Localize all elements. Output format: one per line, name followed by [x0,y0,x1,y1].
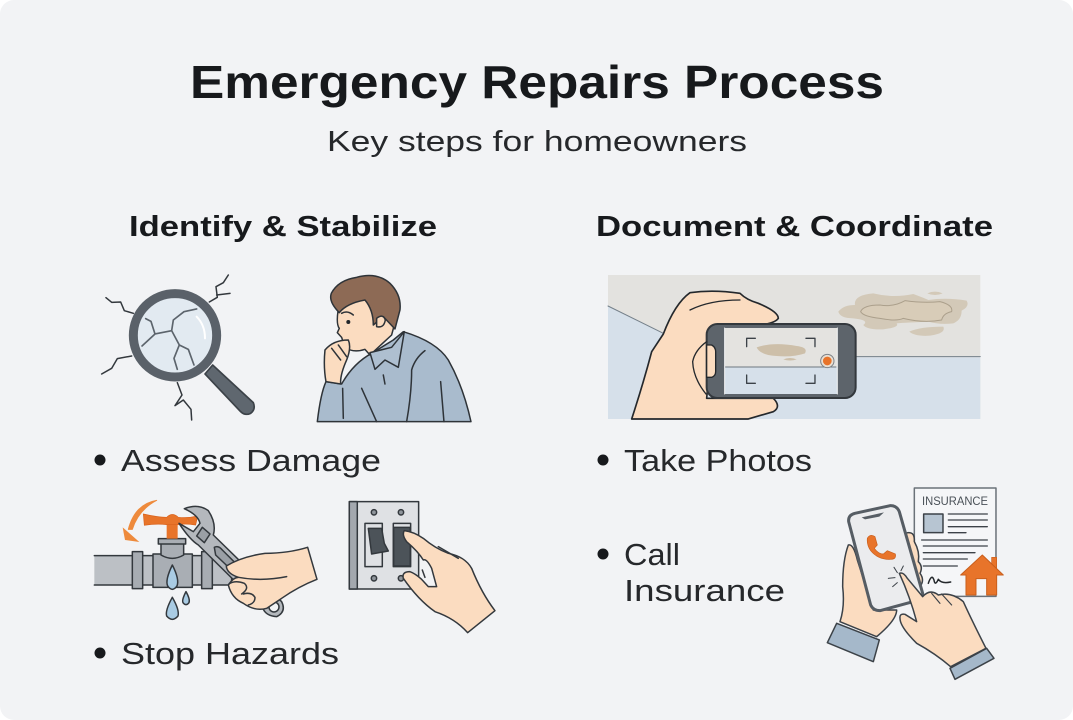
bullet: stop hazards: Stop Hazards [121,636,339,671]
insurance document [914,488,996,596]
bullet: call insurance: Call [624,537,680,572]
back hand fingers [905,533,922,587]
bullet: take photos: Take Photos [624,443,812,478]
heading: document and coordinate: Document & Coordinate [596,211,993,243]
icon: worried person [317,275,471,422]
insurance document: INSURANCE [922,494,988,508]
icon: orange house [961,555,1003,595]
left hand [840,545,897,637]
icon: insurance form and phone call [827,488,1003,679]
phone [849,506,923,611]
left sleeve [827,623,879,662]
bullet: call insurance [598,537,785,608]
bullet: assess damage: Assess Damage [121,443,381,478]
icon: turn arrow [123,500,157,542]
icon: magnifying glass over cracks [102,275,254,420]
icon: wrench shutting off valve [94,500,317,619]
heading: identify and stabilize: Identify & Stabilize [129,211,437,243]
icon: phone handset [867,535,896,559]
icon: hand flipping light switch [349,502,495,633]
hand behind phone [632,291,778,419]
illustration: photographing ceiling stain [608,275,980,419]
right sleeve [950,648,994,679]
title: Emergency Repairs Process [190,56,884,108]
right hand [899,573,986,667]
bullet: call insurance: Insurance [624,573,785,608]
subtitle: Key steps for homeowners [327,126,747,158]
